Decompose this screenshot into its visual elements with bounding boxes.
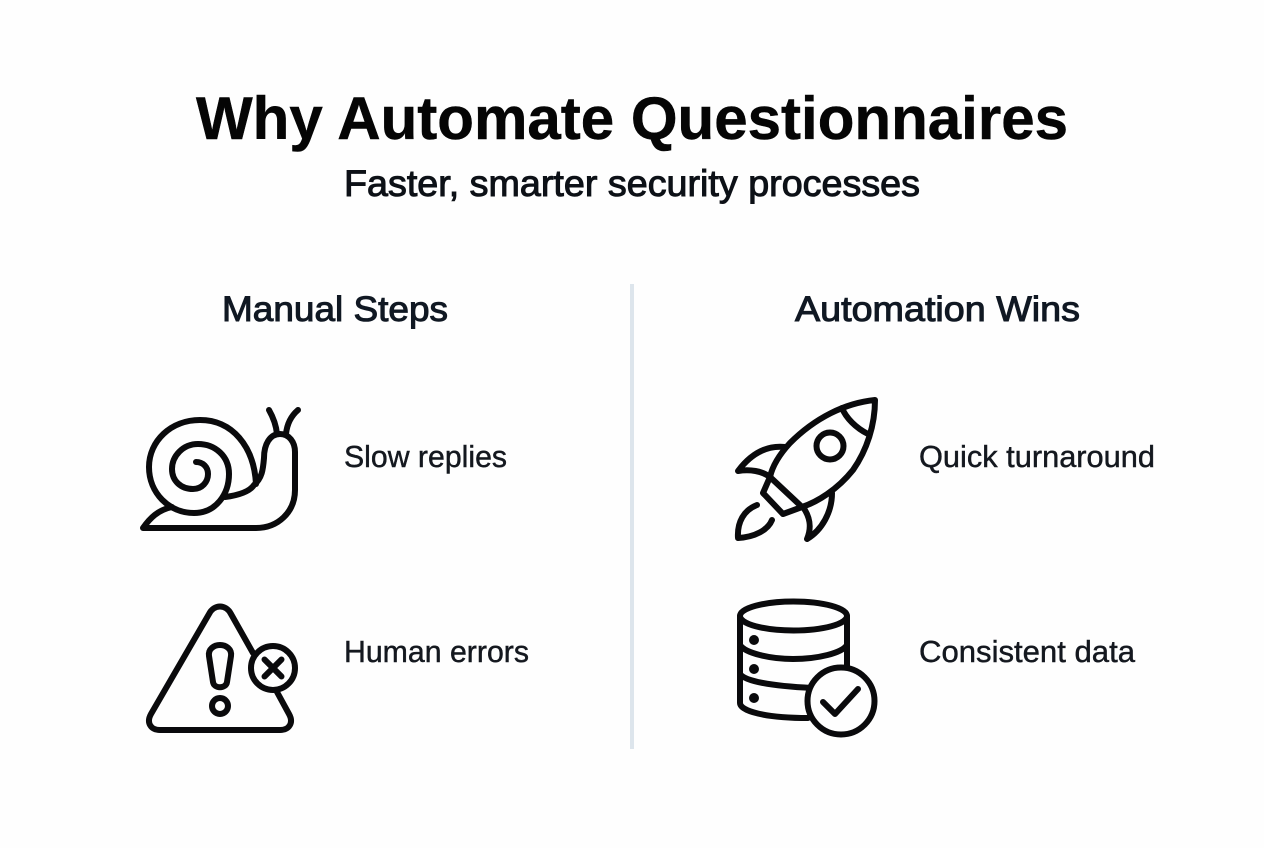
icon: snail <box>143 410 298 528</box>
title: Why Automate Questionnaires <box>196 85 1068 152</box>
icon: database with check <box>740 602 874 734</box>
label: consistent data: Consistent data <box>919 634 1136 669</box>
icon: rocket <box>738 400 875 539</box>
heading: automation wins: Automation Wins <box>795 290 1080 329</box>
heading: manual steps: Manual Steps <box>222 290 448 329</box>
icon: warning triangle with x <box>149 606 295 730</box>
panel: automation wins <box>738 290 1155 734</box>
subtitle: Faster, smarter security processes <box>344 163 920 204</box>
panel: manual steps <box>143 290 529 730</box>
label: quick turnaround: Quick turnaround <box>919 439 1155 474</box>
label: slow replies: Slow replies <box>344 439 507 474</box>
divider <box>630 284 634 749</box>
label: human errors: Human errors <box>344 634 529 669</box>
